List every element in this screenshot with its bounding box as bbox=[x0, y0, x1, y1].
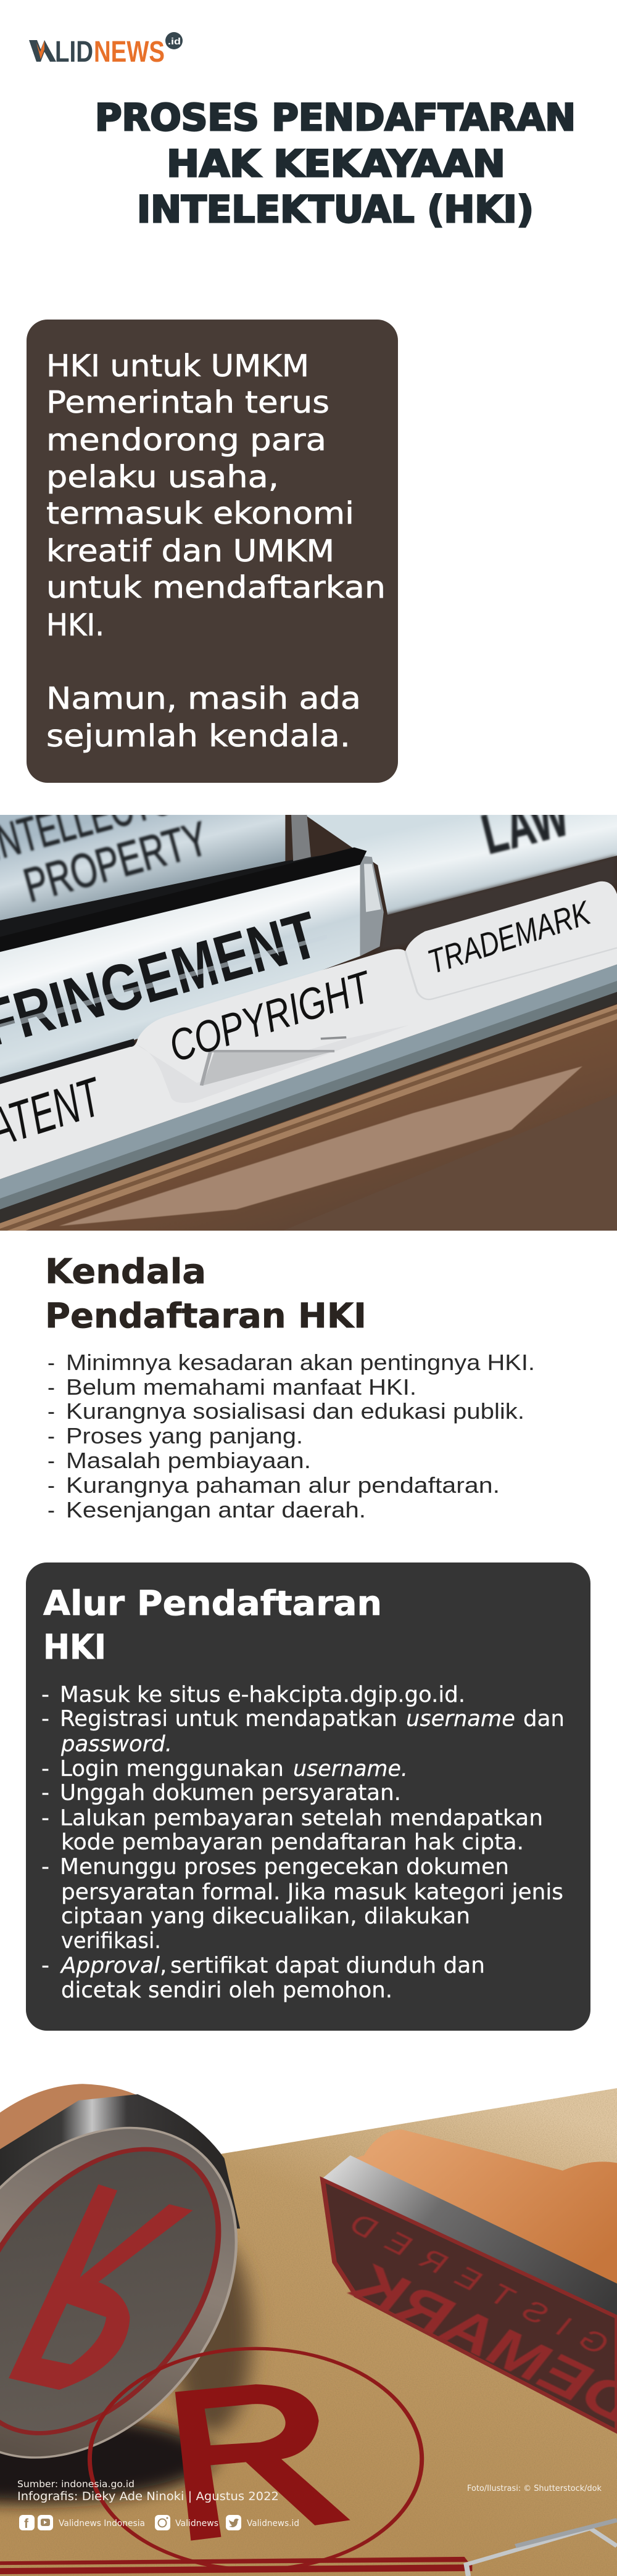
heading: Kendala Pendaftaran HKI: Kendala bbox=[45, 1252, 206, 1291]
list: alur: Approval bbox=[60, 1953, 160, 1978]
list: kendala: - bbox=[48, 1398, 55, 1424]
source and credit bbox=[17, 2479, 279, 2503]
list: alur bbox=[41, 1682, 565, 2003]
label: Validnews.id: Validnews.id bbox=[247, 2519, 299, 2529]
intro text: mendorong para bbox=[46, 423, 326, 458]
list: kendala: Minimnya kesadaran akan pentingnya HKI. bbox=[66, 1350, 535, 1375]
paper clip bbox=[466, 2520, 617, 2576]
list: alur: - bbox=[41, 1854, 49, 1880]
list: kendala: Kurangnya sosialisasi dan edukasi publik. bbox=[66, 1398, 524, 1424]
list: alur: Menunggu proses pengecekan dokumen bbox=[60, 1854, 509, 1880]
list: alur: , bbox=[160, 1953, 167, 1978]
list: alur: password. bbox=[60, 1732, 172, 1757]
list: kendala: Proses yang panjang. bbox=[66, 1423, 303, 1448]
list: alur: persyaratan formal. Jika masuk kategori jenis bbox=[61, 1880, 563, 1905]
list: alur: dan bbox=[523, 1706, 565, 1732]
list: kendala: - bbox=[48, 1350, 55, 1375]
list: kendala: - bbox=[48, 1448, 55, 1473]
logo: Validnews.id: NEWS bbox=[94, 36, 165, 68]
intro text: kreatif dan UMKM bbox=[46, 534, 334, 569]
logo: Validnews.id: LID bbox=[55, 36, 93, 68]
title: INTELEKTUAL (HKI) bbox=[137, 188, 534, 231]
right stamp bbox=[320, 2129, 617, 2434]
photo label: intellectual property: PROPERTY bbox=[18, 811, 213, 912]
intro text: Namun, masih ada bbox=[46, 681, 361, 716]
list: alur: Masuk ke situs e-hakcipta.dgip.go.id. bbox=[60, 1682, 465, 1707]
list: alur: Lalukan pembayaran setelah mendapatkan bbox=[60, 1806, 543, 1831]
list: kendala bbox=[48, 1350, 535, 1522]
intro text: HKI. bbox=[46, 608, 104, 643]
paper background bbox=[0, 2088, 617, 2576]
heading: Kendala Pendaftaran HKI: Pendaftaran HKI bbox=[45, 1296, 366, 1335]
icon: youtube bbox=[38, 2515, 53, 2530]
intro text: sejumlah kendala. bbox=[46, 719, 350, 754]
icon: twitter bbox=[226, 2515, 241, 2530]
title bbox=[95, 96, 576, 231]
list: alur: - bbox=[41, 1806, 49, 1831]
list: alur: Registrasi untuk mendapatkan bbox=[60, 1706, 397, 1732]
heading: Kendala Pendaftaran HKI bbox=[45, 1252, 366, 1335]
social links bbox=[19, 2515, 299, 2531]
list: kendala: Kesenjangan antar daerah. bbox=[66, 1497, 366, 1522]
label: Validnews Indonesia: Validnews Indonesia bbox=[59, 2519, 145, 2529]
photo label: intellectual property bbox=[0, 815, 567, 903]
label: Validnews: Validnews bbox=[175, 2519, 218, 2529]
list: alur: username. bbox=[293, 1756, 408, 1781]
list: alur: verifikasi. bbox=[61, 1928, 161, 1954]
list: alur: - bbox=[41, 1780, 49, 1806]
intro text: pelaku usaha, bbox=[46, 460, 279, 495]
panel: HKI untuk UMKM bbox=[27, 320, 398, 783]
left stamp bbox=[0, 2084, 240, 2459]
photo: trademark stamps bbox=[0, 2084, 617, 2576]
list: alur: - bbox=[41, 1756, 49, 1781]
icon: facebook bbox=[19, 2515, 35, 2531]
list: kendala: - bbox=[48, 1374, 55, 1400]
title: PROSES PENDAFTARAN bbox=[95, 96, 576, 139]
intro text: HKI untuk UMKM bbox=[46, 349, 309, 384]
intro text: untuk mendaftarkan bbox=[46, 570, 386, 605]
intro text: termasuk ekonomi bbox=[46, 496, 354, 531]
list: kendala: Belum memahami manfaat HKI. bbox=[66, 1374, 416, 1400]
list: kendala: Masalah pembiayaan. bbox=[66, 1448, 311, 1473]
list: alur: kode pembayaran pendaftaran hak cipta. bbox=[61, 1830, 524, 1855]
photo: file folder tabs bbox=[0, 815, 617, 1231]
list: alur: Unggah dokumen persyaratan. bbox=[60, 1780, 401, 1806]
heading: Alur Pendaftaran HKI: Alur Pendaftaran bbox=[43, 1583, 382, 1623]
photo credit: Foto/Ilustrasi: © Shutterstock/dok bbox=[467, 2483, 602, 2493]
stamped R mark bbox=[0, 2348, 472, 2574]
stamp shadow bbox=[0, 2238, 252, 2503]
logo: Validnews.id: .id bbox=[168, 36, 181, 47]
list: kendala: - bbox=[48, 1497, 55, 1522]
list: alur: sertifikat dapat diunduh dan bbox=[170, 1953, 485, 1978]
list: alur: username bbox=[406, 1706, 515, 1732]
heading: Alur Pendaftaran HKI: HKI bbox=[43, 1627, 106, 1667]
list: alur: dicetak sendiri oleh pemohon. bbox=[61, 1978, 392, 2003]
photo label: copyright: COPYRIGHT bbox=[164, 962, 379, 1071]
title: HAK KEKAYAAN bbox=[167, 142, 505, 186]
source and credit: Sumber: indonesia.go.id bbox=[17, 2479, 135, 2490]
list: kendala: - bbox=[48, 1423, 55, 1448]
intro text: Pemerintah terus bbox=[46, 385, 329, 420]
list: alur: - bbox=[41, 1682, 49, 1707]
list: alur: - bbox=[41, 1953, 49, 1978]
intro text bbox=[46, 349, 386, 754]
list: alur: Login menggunakan bbox=[60, 1756, 284, 1781]
source and credit: Infografis: Dieky Ade Ninoki | Agustus 2022 bbox=[17, 2490, 279, 2503]
list: alur: ciptaan yang dikecualikan, dilakukan bbox=[61, 1904, 470, 1929]
photo label: intellectual property: LAW bbox=[476, 785, 575, 866]
list: alur: - bbox=[41, 1706, 49, 1732]
icon: facebook: f bbox=[24, 2517, 29, 2531]
list: kendala: - bbox=[48, 1472, 55, 1498]
heading: Alur Pendaftaran HKI bbox=[43, 1583, 382, 1667]
logo: Validnews.id bbox=[29, 32, 183, 68]
panel: Alur Pendaftaran HKI bbox=[26, 1563, 590, 2031]
icon: instagram bbox=[155, 2515, 170, 2530]
list: kendala: Kurangnya pahaman alur pendaftaran. bbox=[66, 1472, 500, 1498]
